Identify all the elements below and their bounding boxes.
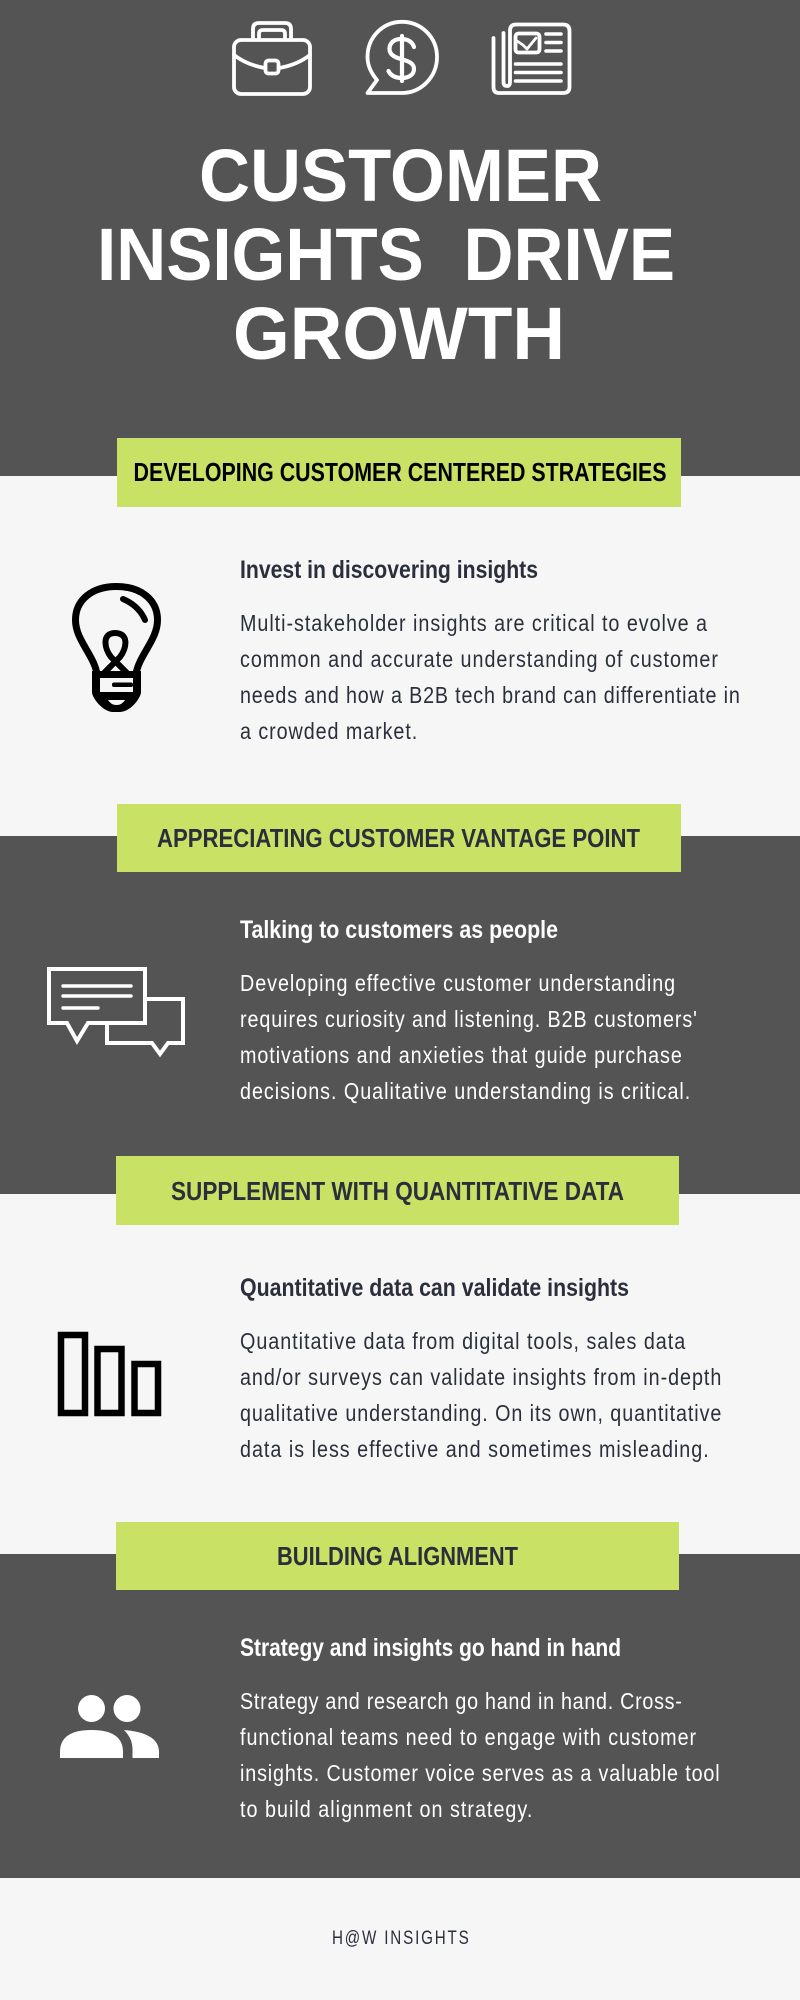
card heading: Strategy and insights go hand in hand <box>240 1634 621 1662</box>
icon: people <box>60 1695 159 1758</box>
card body text: to build alignment on strategy. <box>240 1795 532 1822</box>
section banner <box>117 804 681 872</box>
section banner <box>117 438 681 507</box>
section banner: APPRECIATING CUSTOMER VANTAGE POINT <box>157 823 640 853</box>
footer text: H@W INSIGHTS <box>332 1926 469 1948</box>
section banner: BUILDING ALIGNMENT <box>277 1541 518 1571</box>
card body text: insights. Customer voice serves as a valuable tool <box>240 1759 720 1786</box>
icon: newspaper <box>494 24 570 93</box>
panel: supplement with quantitative data <box>0 1156 800 1554</box>
card body text: motivations and anxieties that guide purchase <box>240 1041 682 1068</box>
card body text <box>240 969 697 1104</box>
card body text: Multi-stakeholder insights are critical to evolve a <box>240 609 708 636</box>
panel: header <box>0 0 800 476</box>
card body text: data is less effective and sometimes misleading. <box>240 1435 709 1462</box>
icon: light bulb <box>76 586 158 712</box>
card body text: functional teams need to engage with customer <box>240 1723 696 1750</box>
card body text: and/or surveys can validate insights from in-depth <box>240 1363 721 1390</box>
card body text: requires curiosity and listening. B2B customers' <box>240 1005 697 1032</box>
panel: footer <box>0 1878 800 2000</box>
panel: developing customer centered strategies <box>0 438 800 836</box>
title: CUSTOMER <box>199 134 602 217</box>
icon: bar chart <box>61 1335 158 1413</box>
card body text: decisions. Qualitative understanding is critical. <box>240 1077 690 1104</box>
card body text: Strategy and research go hand in hand. Cross- <box>240 1687 682 1714</box>
panel: building alignment <box>0 1522 800 1878</box>
section banner: SUPPLEMENT WITH QUANTITATIVE DATA <box>171 1176 624 1206</box>
card heading: Talking to customers as people <box>240 916 558 944</box>
icon: dollar speech bubble <box>368 22 437 93</box>
card body text <box>240 609 740 744</box>
card heading: Invest in discovering insights <box>240 556 538 584</box>
title: GROWTH <box>233 292 565 375</box>
card body text: qualitative understanding. On its own, quantitative <box>240 1399 721 1426</box>
card body text <box>240 1327 721 1462</box>
icon: chat bubbles <box>49 969 183 1054</box>
card body text: Developing effective customer understanding <box>240 969 675 996</box>
section banner <box>116 1156 679 1225</box>
title <box>97 134 675 375</box>
section banner <box>116 1522 679 1590</box>
card heading: Quantitative data can validate insights <box>240 1274 629 1302</box>
title: INSIGHTS DRIVE <box>97 213 675 296</box>
card body text: Quantitative data from digital tools, sales data <box>240 1327 686 1354</box>
section banner: DEVELOPING CUSTOMER CENTERED STRATEGIES <box>134 457 666 487</box>
icon: briefcase <box>234 23 310 94</box>
card body text <box>240 1687 720 1822</box>
card body text: common and accurate understanding of customer <box>240 645 718 672</box>
card body text: a crowded market. <box>240 717 417 744</box>
card body text: needs and how a B2B tech brand can differentiate in <box>240 681 740 708</box>
panel: appreciating customer vantage point <box>0 804 800 1194</box>
